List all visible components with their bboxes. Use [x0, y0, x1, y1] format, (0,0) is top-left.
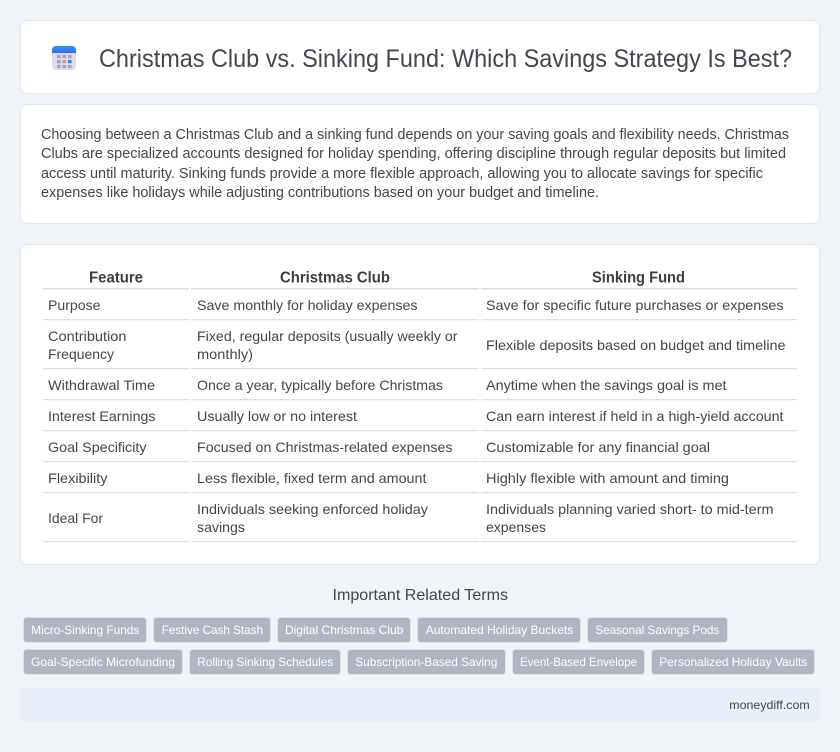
- row: flexibility: Less flexible, fixed term and amount: [197, 470, 427, 486]
- chip: Event-Based Envelope: [512, 650, 644, 674]
- row: goal specificity: Customizable for any financial goal: [486, 439, 710, 455]
- panel: comparison table: [20, 244, 820, 564]
- row: goal specificity: Focused on Christmas-related expenses: [197, 439, 452, 455]
- table header row: Feature: [89, 270, 143, 286]
- title: Christmas Club vs. Sinking Fund: Which Savings Strategy Is Best?: [99, 45, 792, 73]
- table header row: [89, 270, 685, 286]
- row: interest earnings: [48, 408, 784, 424]
- panel: introduction: [20, 104, 820, 224]
- row: withdrawal time: Withdrawal Time: [48, 377, 155, 393]
- intro paragraph: Choosing between a Christmas Club and a sinking fund depends on your saving goals and flexibility needs. Christmas: [41, 127, 789, 143]
- chip: Seasonal Savings Pods: Seasonal Savings Pods: [595, 623, 719, 637]
- chip: Goal-Specific Microfunding: Goal-Specific Microfunding: [31, 655, 175, 669]
- panel: header: [20, 20, 820, 94]
- row: withdrawal time: [48, 377, 727, 393]
- row: contribution frequency: [48, 328, 786, 362]
- chip: Digital Christmas Club: [278, 618, 410, 642]
- intro paragraph: [41, 127, 789, 201]
- row: ideal for: Individuals planning varied short- to mid-term: [486, 501, 774, 517]
- row: withdrawal time: Once a year, typically before Christmas: [197, 377, 443, 393]
- row: interest earnings: Usually low or no interest: [197, 408, 357, 424]
- chip: Rolling Sinking Schedules: Rolling Sinking Schedules: [197, 655, 333, 669]
- icon: calendar: [52, 46, 76, 70]
- chip: Personalized Holiday Vaults: Personalized Holiday Vaults: [659, 655, 807, 669]
- table header row: Christmas Club: [280, 270, 390, 286]
- row: interest earnings: Interest Earnings: [48, 408, 156, 424]
- row: contribution frequency: Contribution: [48, 328, 126, 344]
- chip: Micro-Sinking Funds: [24, 618, 146, 642]
- footer: moneydiff.com: [729, 698, 810, 712]
- chip: Subscription-Based Saving: Subscription-Based Saving: [355, 655, 497, 669]
- row: flexibility: Highly flexible with amount and timing: [486, 470, 729, 486]
- row: interest earnings: Can earn interest if held in a high-yield account: [486, 408, 784, 424]
- intro paragraph: Clubs are specialized accounts designed for holiday spending, offering discipline through regular deposits but limited: [41, 146, 786, 162]
- table header row: Sinking Fund: [592, 270, 685, 286]
- chip: Digital Christmas Club: Digital Christmas Club: [285, 623, 404, 637]
- row: withdrawal time: Anytime when the savings goal is met: [486, 377, 727, 393]
- row: purpose: Save monthly for holiday expenses: [197, 297, 418, 313]
- row: goal specificity: [48, 439, 710, 455]
- heading: important related terms: Important Related Terms: [332, 587, 508, 604]
- chip: Automated Holiday Buckets: [418, 618, 580, 642]
- chip: Seasonal Savings Pods: [588, 618, 728, 642]
- related term chips: [24, 618, 814, 674]
- chip: Micro-Sinking Funds: Micro-Sinking Funds: [31, 623, 139, 637]
- row: contribution frequency: monthly): [197, 346, 253, 362]
- chip: Personalized Holiday Vaults: [652, 650, 814, 674]
- row: goal specificity: Goal Specificity: [48, 439, 146, 455]
- chip: Rolling Sinking Schedules: [190, 650, 340, 674]
- row: contribution frequency: Fixed, regular deposits (usually weekly or: [197, 328, 458, 344]
- row: ideal for: savings: [197, 519, 245, 535]
- footer: [20, 688, 820, 722]
- row: ideal for: Ideal For: [48, 510, 103, 526]
- row: flexibility: Flexibility: [48, 470, 108, 486]
- row: purpose: Purpose: [48, 297, 101, 313]
- row: ideal for: [48, 501, 774, 535]
- row: purpose: [48, 297, 784, 313]
- chip: Festive Cash Stash: Festive Cash Stash: [162, 623, 263, 637]
- chip: Goal-Specific Microfunding: [24, 650, 182, 674]
- row: flexibility: [48, 470, 729, 486]
- chip: Event-Based Envelope: Event-Based Envelope: [520, 655, 637, 669]
- intro paragraph: access until maturity. Sinking funds provide a more flexible approach, allowing you to allocate savings for specific: [41, 166, 763, 182]
- intro paragraph: expenses like holidays while adjusting contributions based on your budget and timeline.: [41, 185, 599, 201]
- row: contribution frequency: Frequency: [48, 346, 114, 362]
- row: contribution frequency: Flexible deposits based on budget and timeline: [486, 337, 786, 353]
- row: ideal for: expenses: [486, 519, 546, 535]
- chip: Automated Holiday Buckets: Automated Holiday Buckets: [426, 623, 573, 637]
- row: purpose: Save for specific future purchases or expenses: [486, 297, 784, 313]
- chip: Subscription-Based Saving: [348, 650, 506, 674]
- row: ideal for: Individuals seeking enforced holiday: [197, 501, 428, 517]
- chip: Festive Cash Stash: [154, 618, 270, 642]
